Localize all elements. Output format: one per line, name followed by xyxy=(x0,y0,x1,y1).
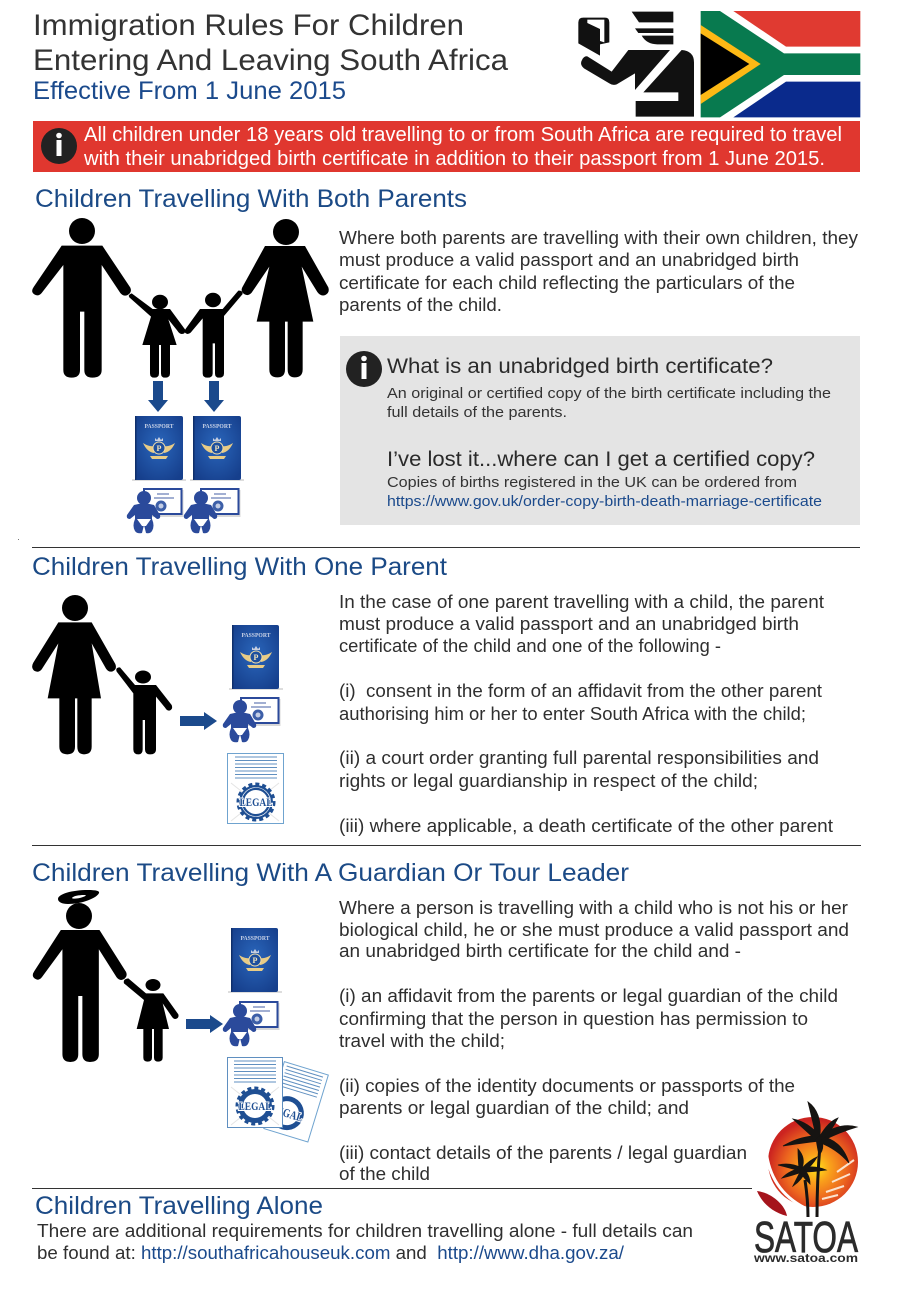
arrow: down left xyxy=(148,381,168,412)
icon: passport: PASSPORT xyxy=(242,633,270,639)
icon: passport: PASSPORT xyxy=(240,936,270,942)
icon: legal documents pair xyxy=(228,1058,328,1142)
text: guardian: biological child, he or she must produce a valid passport and xyxy=(339,919,849,940)
icon: passport 2: P xyxy=(215,444,220,453)
text: one parent: (ii) a court order granting full parental responsibilities and xyxy=(339,747,819,768)
logo: SATOA: SATOA xyxy=(754,1213,858,1262)
icon: legal documents pair: LEGAL xyxy=(269,1102,305,1125)
text: both parents: parents of the child. xyxy=(339,294,502,315)
text: one parent: (iii) where applicable, a death certificate of the other parent xyxy=(339,815,833,836)
text: both parents: certificate for each child reflecting the particulars of the xyxy=(339,272,795,293)
panel: unabridged birth certificate info: full details of the parents. xyxy=(387,404,567,421)
icon: immigration officer xyxy=(578,12,694,117)
text: guardian: travel with the child; xyxy=(339,1030,505,1051)
icon: passport 2 xyxy=(190,416,244,481)
icon: South African flag xyxy=(701,11,861,117)
text: one parent: must produce a valid passport and an unabridged birth xyxy=(339,613,799,634)
icon: family of four xyxy=(32,218,329,378)
text: both parents: Where both parents are travelling with their own children, they xyxy=(339,227,859,248)
title: Immigration Rules For Children xyxy=(33,9,464,42)
panel: red notice banner: with their unabridged birth certificate in addition to their passport from 1 June 2015. xyxy=(83,148,825,170)
icon: legal document xyxy=(228,754,284,824)
text: guardian: Where a person is travelling with a child who is not his or her xyxy=(339,897,848,918)
icon: passport 1: P xyxy=(157,444,162,453)
icon: guardian with halo and child xyxy=(33,890,179,1062)
text: guardian xyxy=(339,897,849,1184)
panel: unabridged birth certificate info: An original or certified copy of the birth certificate including the xyxy=(387,385,831,402)
text: guardian: (iii) contact details of the parents / legal guardian xyxy=(339,1142,747,1163)
icon: mother and child xyxy=(32,595,172,754)
panel: unabridged birth certificate info: https://www.gov.uk/order-copy-birth-death-marriage-certificate xyxy=(387,493,822,510)
heading: one parent: Children Travelling With One Parent xyxy=(32,553,447,581)
text: guardian: of the child xyxy=(339,1163,430,1184)
arrow: right xyxy=(180,712,217,730)
text: guardian: confirming that the person in question has permission to xyxy=(339,1008,808,1029)
text: both parents xyxy=(339,227,859,315)
text: guardian: parents or legal guardian of the child; and xyxy=(339,1097,689,1118)
text: one parent: certificate of the child and one of the following - xyxy=(339,635,721,656)
heading: both parents: Children Travelling With Both Parents xyxy=(35,185,467,213)
text: one parent: In the case of one parent travelling with a child, the parent xyxy=(339,591,824,612)
panel: red notice banner xyxy=(33,121,860,172)
text: both parents: must produce a valid passport and an unabridged birth xyxy=(339,249,799,270)
logo: SATOA: www.satoa.com xyxy=(753,1251,858,1265)
heading: guardian: Children Travelling With A Guardian Or Tour Leader xyxy=(32,859,629,887)
palm trees xyxy=(778,1102,857,1217)
icon: passport 1 xyxy=(132,416,186,481)
text: travelling alone: There are additional requirements for children travelling alone - full details can xyxy=(37,1220,693,1241)
icon: passport 1: PASSPORT xyxy=(144,424,174,430)
text: one parent: authorising him or her to enter South Africa with the child; xyxy=(339,703,806,724)
icon: baby with birth certificate xyxy=(223,698,280,742)
icon: info xyxy=(41,128,77,164)
text: guardian: (i) an affidavit from the parents or legal guardian of the child xyxy=(339,985,838,1006)
panel: unabridged birth certificate info: Copies of births registered in the UK can be ordered from xyxy=(387,474,797,491)
text: guardian: an unabridged birth certificate for the child and - xyxy=(339,940,741,961)
text: travelling alone: be found at: http://southafricahouseuk.com and http://www.dha.gov.za/ xyxy=(37,1242,625,1263)
arrow: right xyxy=(186,1015,223,1033)
text: one parent xyxy=(339,591,833,836)
panel: unabridged birth certificate info xyxy=(340,336,860,525)
title: Entering And Leaving South Africa xyxy=(33,44,509,77)
icon: passport xyxy=(229,625,283,690)
icon: baby with birth certificate 1 xyxy=(127,489,184,533)
logo: SATOA xyxy=(753,1102,858,1265)
icon: passport: P xyxy=(254,653,259,662)
subtitle: Effective From 1 June 2015 xyxy=(33,77,346,105)
icon: baby with birth certificate 2 xyxy=(184,489,240,533)
icon: info xyxy=(346,351,382,387)
icon: passport: P xyxy=(253,956,258,965)
panel: unabridged birth certificate info: I’ve lost it...where can I get a certified copy? xyxy=(387,447,815,471)
icon: passport 2: PASSPORT xyxy=(202,424,232,430)
icon: passport xyxy=(228,928,282,993)
text: travelling alone xyxy=(37,1220,693,1263)
icon: baby with birth certificate xyxy=(223,1002,280,1046)
arrow: down right xyxy=(204,381,224,412)
text: one parent: (i) consent in the form of an affidavit from the other parent xyxy=(339,680,822,701)
panel: red notice banner: All children under 18 years old travelling to or from South Africa are required to travel xyxy=(84,124,842,146)
text: guardian: (ii) copies of the identity documents or passports of the xyxy=(339,1075,795,1096)
icon: legal documents pair: LEGAL xyxy=(238,1099,272,1113)
icon: legal document: LEGAL xyxy=(240,795,272,809)
title xyxy=(33,9,509,77)
panel: unabridged birth certificate info: What is an unabridged birth certificate? xyxy=(387,354,773,378)
text: one parent: rights or legal guardianship in respect of the child; xyxy=(339,770,758,791)
heading: travelling alone: Children Travelling Alone xyxy=(35,1192,323,1220)
